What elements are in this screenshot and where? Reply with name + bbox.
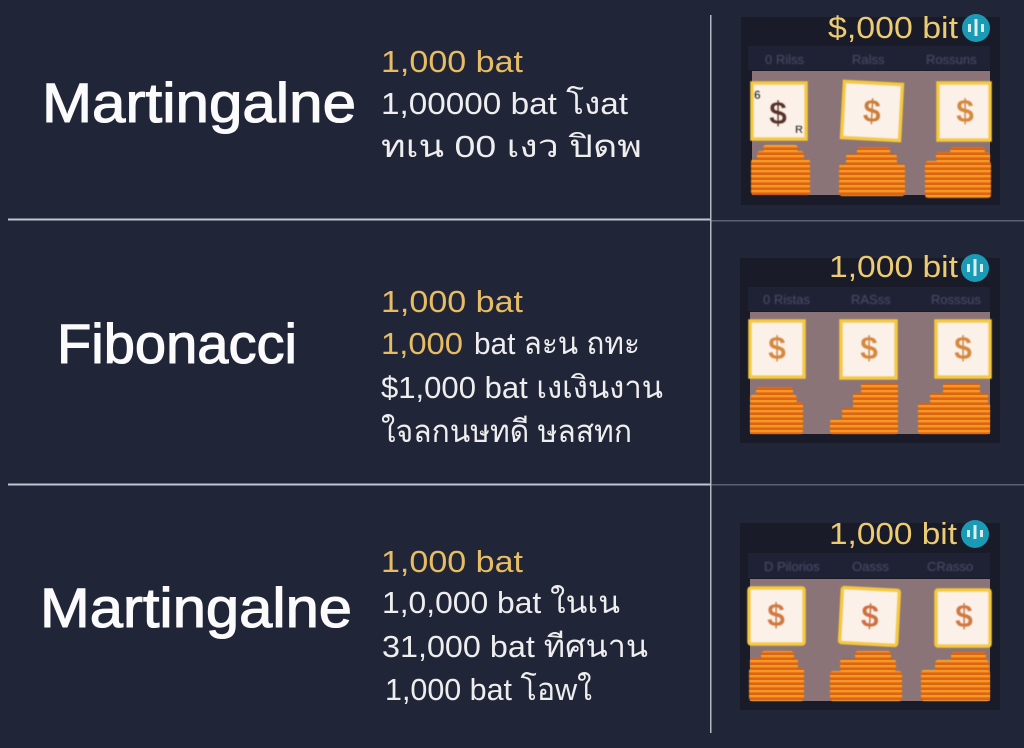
heading: Martingalne row 1: Martingalne <box>42 71 356 134</box>
column labels: Rossuns <box>926 52 977 67</box>
playing cards: $ <box>862 93 882 129</box>
text block: row 2 details: bat ละน ถทะ <box>474 326 640 361</box>
amount label: 1,000 bit <box>829 249 958 284</box>
amount label: $,000 bit <box>828 10 958 45</box>
playing cards: $ <box>954 330 972 366</box>
playing cards: 6 <box>754 88 761 102</box>
text block: row 2 details: 1,000 bat <box>381 284 523 319</box>
column labels: RASss <box>851 292 891 307</box>
playing cards <box>749 588 990 646</box>
playing cards: $ <box>860 330 878 366</box>
text block: row 2 details: $1,000 bat เงเงินงาน <box>381 370 663 405</box>
column labels: 0 Ristas <box>763 292 810 307</box>
playing cards: $ <box>955 598 973 634</box>
heading: Fibonacci: Fibonacci <box>57 312 297 375</box>
panel: game screenshot row 1 <box>741 10 1000 205</box>
column labels: 0 Rilss <box>765 52 805 67</box>
coin stacks <box>749 651 990 701</box>
panel: game screenshot row 3 <box>740 516 1000 710</box>
text block: row 1 details: ทเน 00 เงว ปิดพ <box>381 129 642 164</box>
coin stacks <box>750 383 990 434</box>
column labels: CRasso <box>927 559 973 574</box>
column labels <box>763 292 981 307</box>
playing cards <box>750 321 990 378</box>
text block: row 1 details <box>381 44 642 164</box>
column labels <box>764 559 973 574</box>
playing cards: R <box>795 124 803 136</box>
playing cards: $ <box>767 597 785 633</box>
column labels: D Pilorios <box>764 559 820 574</box>
column labels <box>765 52 977 67</box>
text block: row 1 details: 1,000 bat <box>381 44 523 79</box>
playing cards: $ <box>769 95 787 131</box>
icon: teal badge <box>962 14 990 42</box>
text block: row 3 details: 1,000 bat <box>381 544 523 579</box>
column labels: Rosssus <box>931 292 981 307</box>
column labels: Ralss <box>852 52 885 67</box>
playing cards: $ <box>860 598 880 634</box>
text block: row 3 details: 31,000 bat ทีศนาน <box>382 629 648 664</box>
heading: Martingalne row 3: Martingalne <box>40 576 352 639</box>
text block: row 3 details: 1,000 bat โอwใ <box>385 672 592 707</box>
coin stacks <box>751 145 991 198</box>
text block: row 2 details <box>381 284 663 449</box>
text block: row 1 details: 1,00000 bat โงat <box>381 86 628 121</box>
panel: game screenshot row 2 <box>740 249 1000 443</box>
text block: row 3 details: 1,0,000 bat ในเน <box>382 585 620 620</box>
text block: row 2 details: 1,000 <box>381 326 463 361</box>
playing cards: $ <box>956 93 974 129</box>
icon: teal badge <box>961 254 989 282</box>
playing cards <box>752 82 990 140</box>
playing cards: $ <box>768 330 786 366</box>
column labels: Oasss <box>852 559 889 574</box>
icon: teal badge <box>961 520 989 548</box>
amount label: 1,000 bit <box>829 516 957 551</box>
text block: row 3 details <box>381 544 648 707</box>
text block: row 2 details: ใจลกนษทดี ษลสทก <box>381 414 632 449</box>
